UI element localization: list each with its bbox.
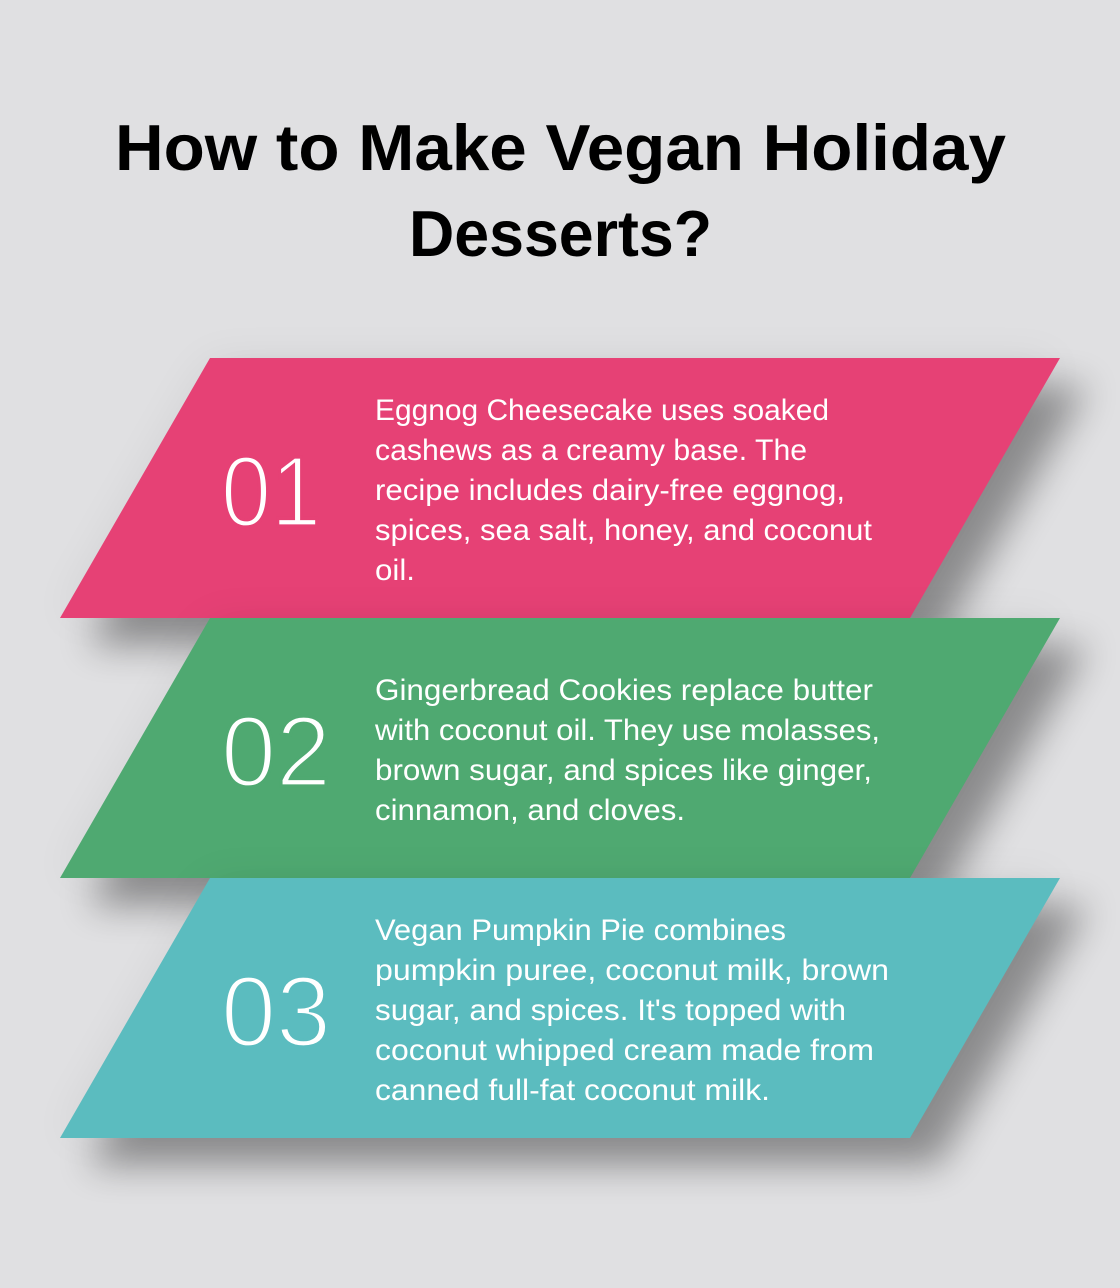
title: Desserts? bbox=[409, 197, 712, 270]
panel: step 01 eggnog cheesecake bbox=[60, 358, 1060, 618]
text block 01: oil. bbox=[375, 554, 415, 587]
panel: step 02 gingerbread cookies bbox=[60, 618, 1060, 878]
text block 02: brown sugar, and spices like ginger, bbox=[375, 754, 872, 787]
text block 01 bbox=[375, 394, 873, 587]
text block 01: recipe includes dairy-free eggnog, bbox=[375, 474, 845, 507]
number 01: 01 bbox=[221, 436, 321, 548]
number 03: 03 bbox=[221, 956, 331, 1068]
title bbox=[115, 111, 1006, 270]
text block 03: canned full-fat coconut milk. bbox=[375, 1074, 770, 1107]
panel 02 background bbox=[60, 618, 1060, 878]
text block 02 bbox=[374, 674, 880, 827]
title: How to Make Vegan Holiday bbox=[115, 111, 1006, 184]
panel 01 background bbox=[60, 358, 1060, 618]
text block 02: Gingerbread Cookies replace butter bbox=[375, 674, 873, 707]
number 02: 02 bbox=[221, 696, 331, 808]
text block 01: Eggnog Cheesecake uses soaked bbox=[375, 394, 829, 427]
text block 03: pumpkin puree, coconut milk, brown bbox=[375, 954, 889, 987]
text block 03 bbox=[375, 914, 889, 1107]
panel 03 background bbox=[60, 878, 1060, 1138]
text block 01: cashews as a creamy base. The bbox=[375, 434, 807, 467]
text block 01: spices, sea salt, honey, and coconut bbox=[375, 514, 873, 547]
panel: step 03 vegan pumpkin pie bbox=[60, 878, 1060, 1138]
text block 02: with coconut oil. They use molasses, bbox=[374, 714, 880, 747]
text block 02: cinnamon, and cloves. bbox=[375, 794, 685, 827]
text block 03: sugar, and spices. It's topped with bbox=[375, 994, 846, 1027]
text block 03: coconut whipped cream made from bbox=[375, 1034, 874, 1067]
text block 03: Vegan Pumpkin Pie combines bbox=[375, 914, 786, 947]
